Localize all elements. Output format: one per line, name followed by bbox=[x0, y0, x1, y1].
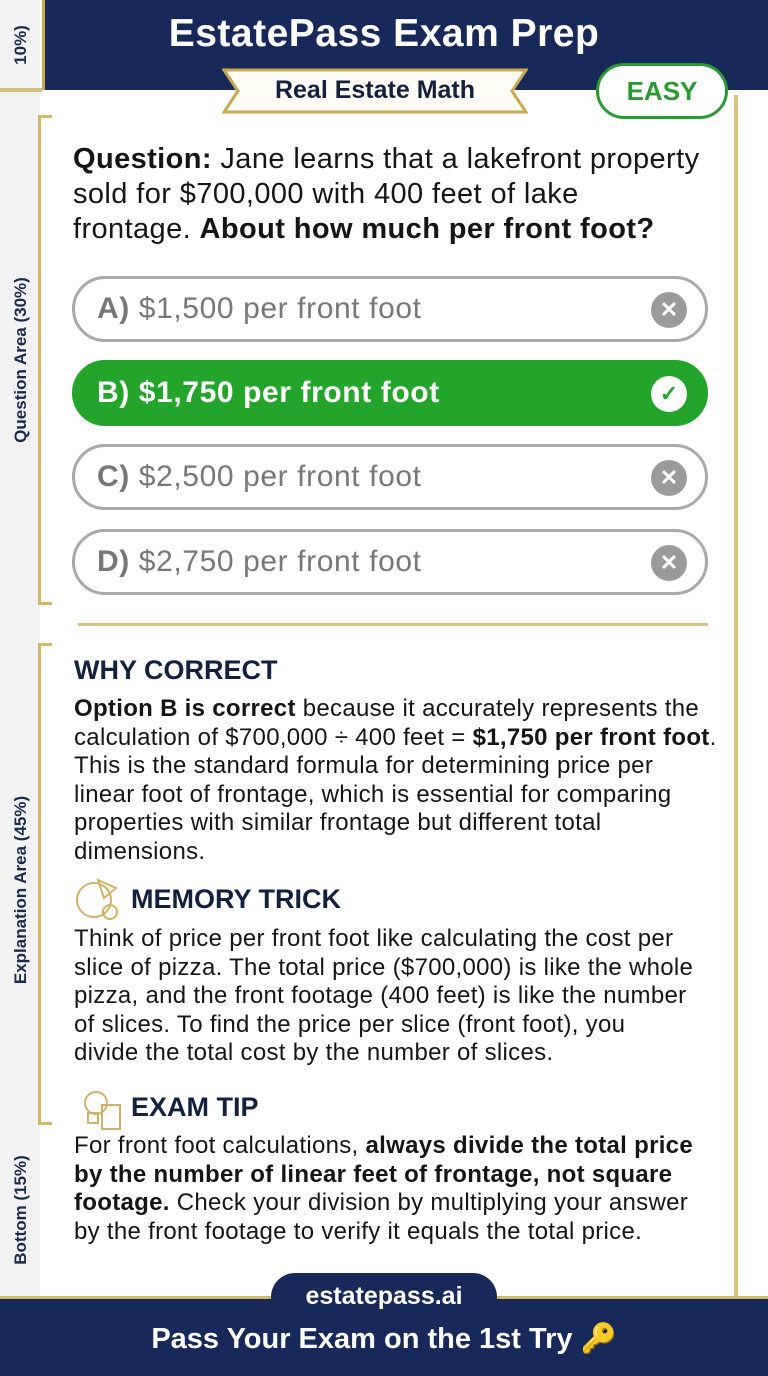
label: question area: Question Area (30%) bbox=[11, 277, 30, 443]
icon: pizza bbox=[76, 878, 118, 920]
option D bbox=[72, 529, 708, 595]
text: why correct: Option B is correct because it accurately represents the bbox=[74, 695, 699, 722]
text: why correct: calculation of $700,000 ÷ 400 feet = $1,750 per front foot. bbox=[74, 724, 717, 751]
heading: exam tip: EXAM TIP bbox=[131, 1092, 259, 1122]
badge: EASY: EASY bbox=[627, 76, 697, 106]
question text: frontage. About how much per front foot? bbox=[73, 213, 655, 245]
header bar bbox=[42, 0, 768, 90]
label: bottom: Bottom (15%) bbox=[11, 1155, 30, 1265]
text: exam tip: by the front footage to verify it equals the total price. bbox=[74, 1218, 642, 1245]
text: memory trick bbox=[74, 925, 693, 1066]
label: 10%: 10%) bbox=[11, 25, 30, 65]
title: EstatePass Exam Prep bbox=[169, 12, 599, 55]
option A: ✕ bbox=[660, 297, 678, 322]
footer bbox=[0, 1296, 768, 1376]
option B correct bbox=[72, 360, 708, 426]
banner: Real Estate Math: Real Estate Math bbox=[275, 76, 475, 104]
badge: EASY bbox=[596, 63, 728, 119]
footer pill: url bbox=[271, 1273, 497, 1321]
text: why correct: linear foot of frontage, which is essential for comparing bbox=[74, 781, 671, 808]
text: memory trick: slice of pizza. The total price ($700,000) is like the whole bbox=[74, 954, 693, 981]
option D: ✕ bbox=[660, 550, 678, 575]
option A bbox=[72, 276, 708, 342]
option C: ✕ bbox=[660, 465, 678, 490]
text: why correct bbox=[74, 695, 717, 865]
text: why correct: dimensions. bbox=[74, 838, 205, 865]
option D: D) $2,750 per front foot bbox=[97, 545, 422, 578]
question text: Question: Jane learns that a lakefront property bbox=[73, 143, 699, 175]
text: why correct: This is the standard formula for determining price per bbox=[74, 752, 653, 779]
question text: sold for $700,000 with 400 feet of lake bbox=[73, 178, 579, 210]
option C bbox=[72, 444, 708, 510]
text: memory trick: pizza, and the front footage (400 feet) is like the number bbox=[74, 982, 686, 1009]
label: explanation area: Explanation Area (45%) bbox=[11, 796, 30, 984]
footer tagline: Pass Your Exam on the 1st Try 🔑 bbox=[151, 1323, 617, 1355]
text: exam tip bbox=[74, 1132, 693, 1245]
question text bbox=[73, 143, 699, 245]
option A: A) $1,500 per front foot bbox=[97, 292, 422, 325]
banner: Real Estate Math bbox=[222, 68, 528, 114]
heading: why correct: WHY CORRECT bbox=[74, 655, 278, 685]
heading: memory trick: MEMORY TRICK bbox=[131, 884, 341, 914]
text: why correct: properties with similar frontage but different total bbox=[74, 809, 601, 836]
text: memory trick: Think of price per front foot like calculating the cost per bbox=[74, 925, 673, 952]
left strip bbox=[0, 0, 40, 1300]
option B correct: ✓ bbox=[660, 381, 678, 406]
text: memory trick: divide the total cost by the number of slices. bbox=[74, 1039, 553, 1066]
icon: bulb calculator bbox=[84, 1091, 121, 1130]
text: exam tip: by the number of linear feet of frontage, not square bbox=[74, 1161, 672, 1188]
text: exam tip: footage. Check your division by multiplying your answer bbox=[74, 1189, 688, 1216]
option B correct: B) $1,750 per front foot bbox=[97, 376, 440, 409]
content panel border bbox=[734, 95, 738, 1300]
text: exam tip: For front foot calculations, always divide the total price bbox=[74, 1132, 693, 1159]
option C: C) $2,500 per front foot bbox=[97, 460, 422, 493]
footer pill: url: estatepass.ai bbox=[305, 1282, 463, 1310]
text: memory trick: of slices. To find the price per slice (front foot), you bbox=[74, 1011, 625, 1038]
